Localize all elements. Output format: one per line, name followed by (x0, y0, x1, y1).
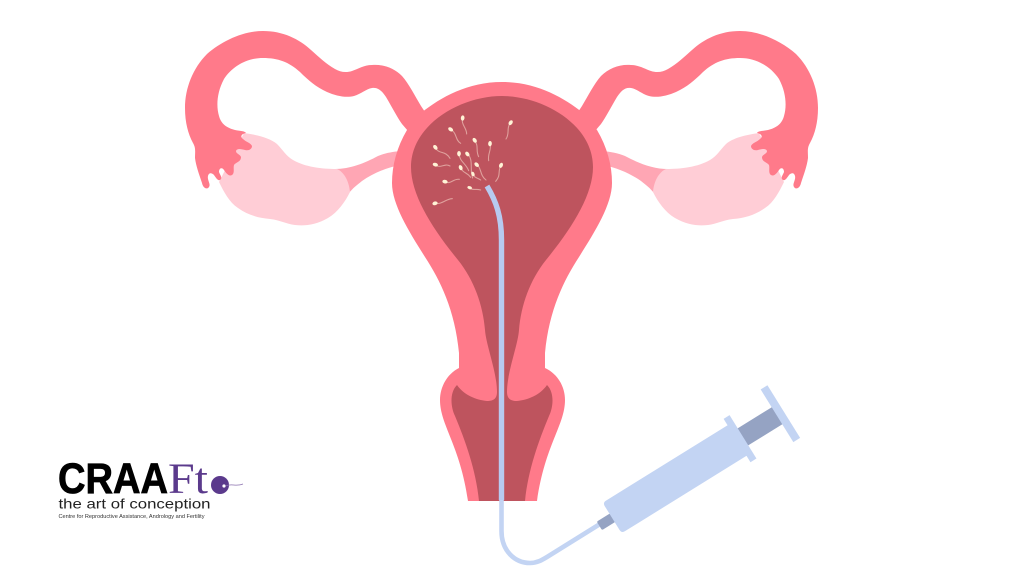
catheter (487, 186, 600, 563)
right ovary (653, 133, 784, 225)
logo: CRAAFt (58, 455, 243, 520)
left ovarian ligament (335, 151, 400, 193)
syringe (583, 385, 800, 552)
logo tagline: the art of conception (58, 496, 210, 512)
left ovary and fallopian tube (185, 31, 425, 225)
right fallopian tube (578, 31, 818, 188)
sperm cluster (432, 115, 514, 206)
uterus wall and cervix (392, 82, 612, 501)
syringe barrel (603, 425, 747, 533)
logo wordmark Ft: Ft (168, 456, 208, 503)
logo subtitle: Centre for Reproductive Assistance, Andrology and Fertility (58, 514, 205, 520)
right ovary and fallopian tube (578, 31, 818, 225)
logo wordmark CRAA: CRAA (58, 455, 168, 503)
catheter lower section (502, 480, 600, 563)
plunger rod (736, 406, 784, 446)
logo icon: egg and sperm (211, 476, 243, 494)
right ovarian ligament (603, 151, 668, 193)
plunger handle (761, 385, 800, 442)
catheter upper section (487, 186, 502, 500)
uterine cavity and cervical canal (411, 96, 593, 501)
barrel flange (724, 415, 756, 462)
left fallopian tube (185, 31, 425, 188)
left ovary (219, 133, 350, 225)
syringe nozzle (597, 513, 616, 530)
